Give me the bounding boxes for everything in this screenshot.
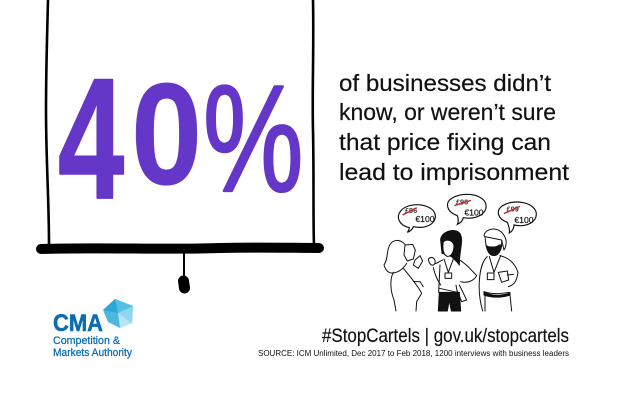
person: left woman from behind <box>384 240 423 311</box>
speech bubble: middle: £90 <box>456 198 468 207</box>
logo wordmark: CMA <box>53 310 103 337</box>
headline text: lead to imprisonment <box>339 159 570 185</box>
CMA logo <box>53 299 133 359</box>
big statistic: 40%: % <box>203 55 303 224</box>
speech bubble: middle: €100 <box>464 208 484 218</box>
big statistic: 40% <box>58 43 303 235</box>
speech bubble: left: €100 <box>415 214 435 224</box>
speech bubble: middle <box>448 194 486 224</box>
illustration: three colleagues with speech bubbles <box>384 194 536 311</box>
CMA logo: Competition & <box>53 335 121 347</box>
speech bubble: left <box>398 205 435 232</box>
CMA logo: Markets Authority <box>53 347 132 359</box>
source note: SOURCE: ICM Unlimited, Dec 2017 to Feb 2018, 1200 interviews with business leaders <box>258 349 569 358</box>
big statistic: 40%: 0 <box>131 53 202 215</box>
speech bubble: left: £96 <box>405 206 417 215</box>
speech bubble: right: £99 <box>507 205 519 214</box>
logo hexagon mark <box>103 299 133 328</box>
person: middle woman with lanyard <box>428 231 477 311</box>
projector screen <box>41 0 319 288</box>
person: right man with turban <box>479 229 518 311</box>
headline text: that price fixing can <box>339 129 551 155</box>
headline text: of businesses didn’t <box>339 70 552 96</box>
speech bubble: right <box>498 202 536 233</box>
headline text <box>339 70 570 185</box>
big statistic: 40%: 4 <box>58 43 124 235</box>
headline text: know, or weren’t sure <box>339 99 556 125</box>
speech bubble: right: €100 <box>514 215 534 225</box>
campaign hashtag and URL: #StopCartels | gov.uk/stopcartels <box>322 325 569 347</box>
